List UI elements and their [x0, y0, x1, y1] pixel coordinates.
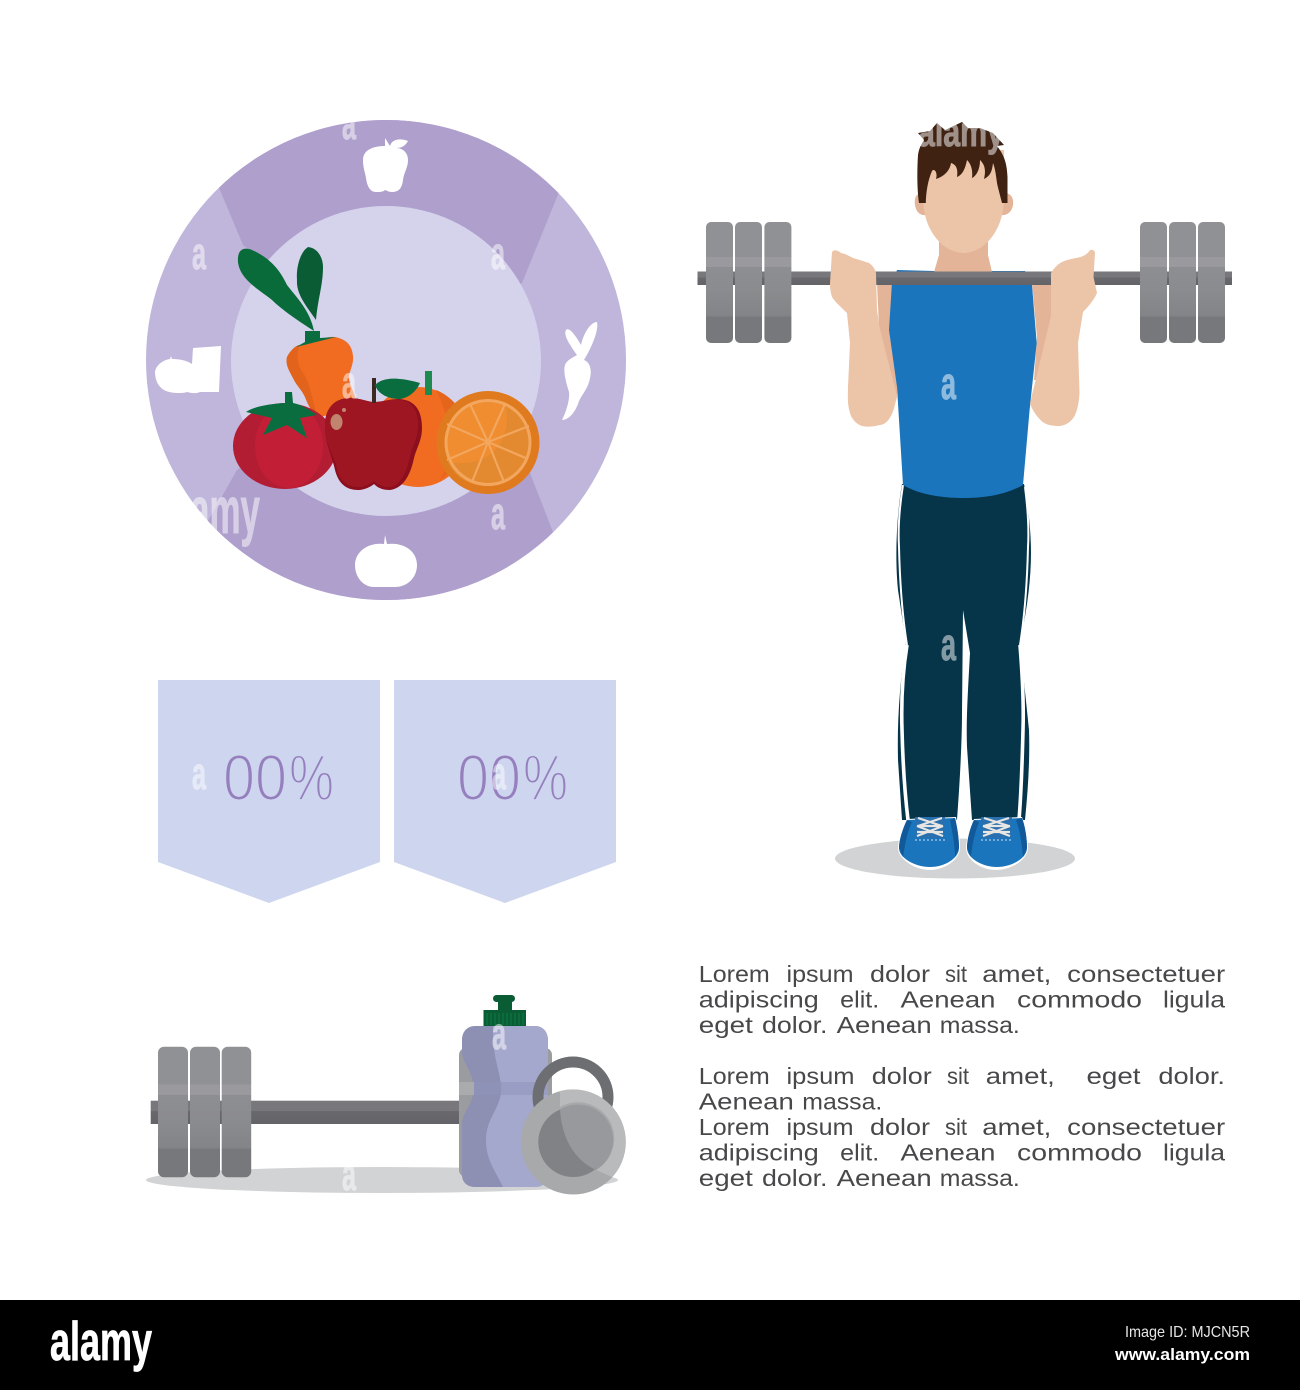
paragraph three: massa. [940, 1165, 1020, 1191]
watermark glyphs: a [342, 98, 357, 149]
left forearm and fist [830, 250, 897, 427]
paragraph three: sit [945, 1114, 968, 1140]
paragraph three: consectetuer [1067, 1114, 1226, 1140]
paragraph two: amet, [986, 1063, 1055, 1089]
icon: dumbbell [151, 1047, 463, 1177]
paragraph two [699, 1063, 1225, 1114]
paragraph three: ligula [1163, 1140, 1225, 1166]
footer logo: alamy [50, 1310, 152, 1372]
watermark glyphs: a [192, 748, 207, 799]
paragraph one: commodo [1017, 986, 1142, 1012]
percentage value left [223, 741, 334, 814]
trousers [896, 484, 1031, 820]
paragraph three: adipiscing [699, 1140, 819, 1166]
icon: white tomato silhouette [355, 535, 417, 587]
icon: white carrot silhouette [562, 322, 597, 420]
icon: white orange and glass silhouette [155, 346, 221, 393]
figure: man lifting barbell [698, 122, 1232, 870]
watermark glyphs: a [492, 748, 507, 799]
shirt [889, 270, 1037, 498]
paragraph one: sit [945, 961, 968, 987]
footer bar [0, 1300, 1300, 1390]
paragraph two: Lorem [699, 1063, 770, 1089]
percentage value right: 00 [457, 741, 521, 814]
percentage value left: 00 [223, 741, 287, 814]
paragraph one: consectetuer [1067, 961, 1226, 987]
text block: lorem ipsum [699, 961, 1226, 1191]
paragraph three: dolor. [762, 1165, 828, 1191]
barbell: bar [698, 272, 1232, 285]
face [923, 150, 1004, 253]
icon: orange slice [436, 391, 540, 494]
watermark glyphs: a [941, 358, 957, 409]
icon: tomato [233, 392, 337, 489]
watermark glyphs: a [342, 357, 357, 408]
paragraph two: massa. [802, 1088, 882, 1114]
icon: apple [325, 378, 422, 490]
icon: water bottle [459, 995, 552, 1187]
ears [915, 193, 1013, 215]
neck [934, 230, 992, 272]
paragraph three: Aenean [900, 1140, 996, 1166]
paragraph one: adipiscing [699, 986, 819, 1012]
paragraph one: elit. [840, 986, 879, 1012]
watermark glyphs: amy [190, 473, 260, 547]
ground shadow under equipment [146, 1167, 618, 1193]
paragraph one: dolor [870, 961, 930, 987]
watermark glyphs: a [491, 488, 506, 539]
paragraph two: eget [1086, 1063, 1141, 1089]
paragraph one: massa. [940, 1012, 1020, 1038]
watermark glyphs [190, 98, 1004, 1200]
percentage value right: % [523, 741, 568, 814]
paragraph one: eget [699, 1012, 754, 1038]
right forearm and fist [1030, 250, 1097, 426]
darker bottom ring segment [208, 468, 553, 600]
watermark glyphs: a [342, 1149, 357, 1200]
darker top ring segment [219, 120, 558, 284]
barbell: left plates [706, 222, 791, 343]
website: www.alamy.com [1114, 1345, 1250, 1364]
paragraph one: Lorem [699, 961, 770, 987]
paragraph two: dolor [872, 1063, 932, 1089]
watermark glyphs: a [192, 228, 207, 279]
paragraph one: Aenean [837, 1012, 932, 1038]
paragraph two: Aenean [699, 1088, 794, 1114]
left shoe [898, 817, 960, 870]
panel: food wheel [146, 120, 626, 600]
paragraph three: dolor [870, 1114, 930, 1140]
icon: white apple silhouette [363, 138, 408, 192]
paragraph one: amet, [982, 961, 1051, 987]
image id: Image ID: MJCN5R [1125, 1324, 1250, 1341]
paragraph one: ipsum [786, 961, 854, 987]
paragraph three: Lorem [699, 1114, 770, 1140]
barbell: right plates [1140, 222, 1225, 343]
paragraph three: eget [699, 1165, 754, 1191]
percentage value right [457, 741, 568, 814]
paragraph three: amet, [982, 1114, 1051, 1140]
right shoe [966, 817, 1028, 870]
icon: whole orange [368, 371, 468, 487]
paragraph three: Aenean [837, 1165, 932, 1191]
icon: kettlebell [521, 1062, 626, 1194]
bottle cap [484, 995, 526, 1026]
paragraph one: ligula [1163, 986, 1225, 1012]
paragraph three: ipsum [786, 1114, 854, 1140]
paragraph three: elit. [840, 1140, 879, 1166]
icon: carrot [238, 247, 357, 418]
paragraph one: dolor. [762, 1012, 828, 1038]
inner disc [231, 206, 541, 516]
watermark glyphs: a [492, 1008, 507, 1059]
watermark glyphs: a [941, 619, 957, 670]
watermark glyphs: alamy [918, 108, 1004, 155]
percentage value left: % [289, 741, 334, 814]
paragraph two: ipsum [786, 1063, 854, 1089]
panel: percentage tag right [394, 680, 616, 903]
paragraph two: sit [947, 1063, 970, 1089]
paragraph three: commodo [1017, 1140, 1142, 1166]
watermark glyphs: a [491, 228, 506, 279]
paragraph two: dolor. [1158, 1063, 1225, 1089]
panel: percentage tag left [158, 680, 380, 903]
paragraph one [699, 961, 1226, 1038]
hair [917, 122, 1008, 203]
paragraph one: Aenean [900, 986, 996, 1012]
upper arms [877, 283, 1051, 397]
paragraph three [699, 1114, 1226, 1191]
ground shadow under man [835, 838, 1075, 878]
